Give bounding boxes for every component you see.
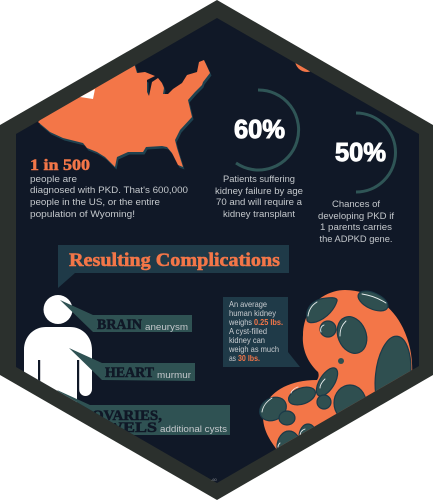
stat text: 1 in 500 [30, 157, 188, 219]
description: kidney transplant [223, 208, 295, 219]
description: the ADPKD gene. [320, 233, 392, 244]
icon: orange kidney sliver at top [295, 62, 310, 72]
description: Chances of [332, 198, 380, 209]
callout: kidney weight: 0.25 lbs. [254, 317, 283, 327]
heading banner: Resulting Complications: Resulting Complications [69, 250, 280, 271]
stat: 50% [318, 113, 396, 244]
description: Patients suffering [223, 173, 295, 184]
callout: kidney weight: weigh as much [228, 344, 279, 354]
panel: contents clipped to hexagon [38, 48, 415, 463]
kidney with cysts [259, 290, 412, 449]
description [215, 173, 303, 219]
callout: kidney weight: kidney can [229, 335, 265, 345]
callout: heart: murmur [157, 369, 191, 380]
description: people in the US, or the entire [30, 196, 160, 207]
callout: brain [60, 300, 192, 333]
callout: heart [69, 348, 195, 381]
number: 50% [335, 137, 386, 167]
description: kidney failure by age [215, 185, 303, 196]
number: 60% [234, 114, 285, 144]
callout: ovaries, bowels [57, 390, 230, 436]
callout: kidney weight: A cyst-filled [229, 326, 267, 336]
callout: ovaries, bowels: OVARIES, [92, 408, 162, 424]
heading: 1 in 500: 1 in 500 [30, 157, 90, 174]
callout: brain: aneurysm [145, 321, 188, 332]
callout: ovaries, bowels: BOWELS [79, 420, 157, 436]
callout: kidney weight: human kidney [229, 308, 277, 318]
stat: 60% [215, 90, 303, 219]
callout: kidney weight: as [229, 353, 236, 363]
footnote: -60 [211, 477, 218, 482]
description [318, 198, 394, 244]
description: 70 and will require a [216, 196, 303, 207]
callout: heart: HEART [105, 365, 154, 381]
callout: kidney weight: weighs [228, 317, 252, 327]
heading banner: Resulting Complications [58, 245, 289, 288]
ring [356, 113, 396, 192]
ring [236, 90, 299, 170]
callout: ovaries, bowels: additional cysts [160, 423, 227, 434]
description: population of Wyoming! [30, 208, 135, 219]
callout: kidney weight: An average [229, 299, 267, 309]
callout: kidney weight: 30 lbs. [238, 353, 260, 363]
callout: kidney weight [223, 297, 300, 367]
description: developing PKD if [318, 210, 394, 221]
description: diagnosed with PKD. That's 600,000 [30, 184, 188, 195]
description [30, 173, 188, 219]
callout: brain: BRAIN [97, 317, 142, 333]
description: people are [30, 173, 77, 184]
description: 1 parents carries [320, 221, 392, 232]
icon: person [24, 295, 92, 402]
map: United States [38, 60, 212, 170]
